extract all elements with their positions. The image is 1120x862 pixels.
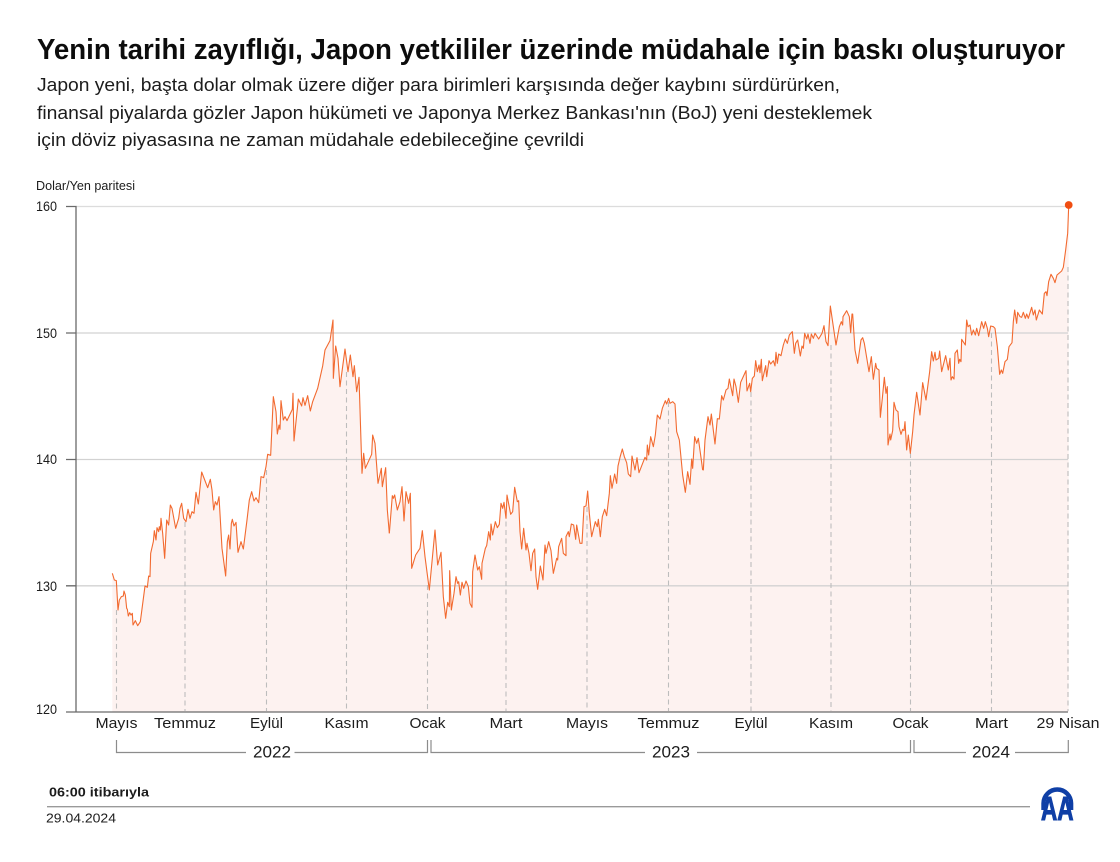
y axis labels: 140: [36, 451, 57, 467]
y axis labels: 120: [36, 701, 57, 717]
title: Yenin tarihi zayıflığı, Japon yetkililer üzerinde müdahale için baskı oluşturuyor: [37, 34, 1065, 66]
y axis labels: 150: [36, 325, 57, 341]
footer: date: 29.04.2024: [46, 810, 116, 826]
year labels: 2022: [253, 744, 291, 762]
y axis labels: [36, 198, 57, 717]
x axis month labels: Kasım: [324, 716, 368, 732]
x axis month labels: Mayıs: [566, 716, 608, 732]
x axis month labels: Eylül: [734, 716, 768, 732]
year labels: 2024: [972, 744, 1010, 762]
x axis month labels: Eylül: [250, 716, 283, 732]
y axis labels: 130: [36, 578, 57, 594]
year labels: [253, 744, 1010, 762]
x axis month labels: Kasım: [809, 716, 853, 732]
x axis month labels: Temmuz: [154, 716, 216, 732]
subtitle text block: finansal piyalarda gözler Japon hükümeti ve Japonya Merkez Bankası'nın (BoJ) yeni desteklemek: [37, 102, 873, 123]
icon: AA logo: [1041, 789, 1074, 827]
x axis month labels: Mart: [490, 716, 522, 732]
end point marker: [1065, 201, 1073, 209]
x axis month labels: Ocak: [410, 716, 446, 732]
footer: time note: 06:00 itibarıyla: [49, 784, 150, 800]
x axis month labels: Temmuz: [638, 716, 700, 732]
x axis month labels: [96, 716, 1100, 732]
year labels: 2023: [652, 744, 690, 762]
icon: AA logo: AA: [1041, 790, 1074, 827]
line chart: USD/JPY: [112, 207, 1069, 626]
year brackets: [116, 740, 1068, 752]
x axis month labels: Ocak: [892, 716, 929, 732]
axis title: Dolar/Yen paritesi: [36, 178, 135, 193]
x axis month labels: Mart: [975, 716, 1008, 732]
area fill under line: [112, 207, 1069, 712]
subtitle text block: için döviz piyasasına ne zaman müdahale edebileceğine çevrildi: [37, 129, 584, 150]
y axis labels: 160: [36, 198, 57, 214]
x axis month labels: 29 Nisan: [1036, 716, 1100, 732]
y axis and ticks: [66, 206, 1068, 712]
x axis month labels: Mayıs: [96, 716, 138, 732]
subtitle text block: [37, 74, 873, 150]
subtitle text block: Japon yeni, başta dolar olmak üzere diğer para birimleri karşısında değer kaybını sürdürürken,: [37, 74, 840, 95]
